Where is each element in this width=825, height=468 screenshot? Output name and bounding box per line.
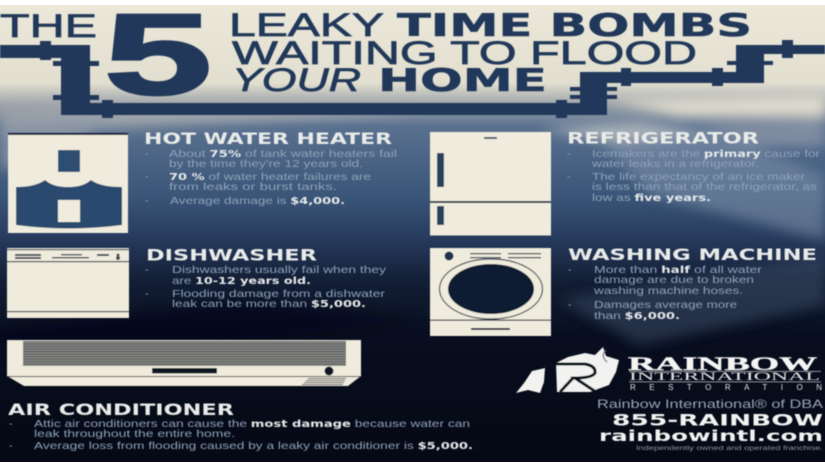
text: washing machine facts: - [568,299,572,311]
text: hot water heater facts [145,148,397,207]
title: THE [0,8,97,44]
text: hot water heater facts: from leaks or burst tanks. [169,181,337,193]
text: dishwasher facts: - [145,264,149,276]
text: refrigerator facts: low as five years. [592,192,711,204]
text: hot water heater facts: - [145,195,149,207]
title: WAITING TO FLOOD [232,35,697,71]
text: dishwasher facts: Flooding damage from a dishwater [172,288,386,300]
heading: washing machine: WASHING MACHINE [568,245,817,264]
text: franchise disclaimer: Independently owned and operated franchise. [636,445,823,452]
title: HOME [378,63,547,99]
text: washing machine facts: More than half of all water [594,264,763,276]
heading: dishwasher: DISHWASHER [146,246,317,264]
text: air conditioner facts: Average loss from flooding caused by a leaky air conditioner is $5,000. [34,440,473,452]
text: hot water heater facts: - [145,148,149,160]
logo wordmark: RAINBOW [628,354,817,375]
text: washing machine facts: Damages average more [594,299,737,311]
text: washing machine facts: washing machine hoses. [593,285,743,297]
icon: refrigerator [430,132,551,236]
logo wordmark: RESTORATION [630,383,822,392]
text: washing machine facts: - [568,264,572,276]
text: air conditioner facts: Attic air conditioners can cause the most damage because water can [34,418,470,430]
text: refrigerator facts: water leaks in a refrigerator. [591,158,759,170]
text: dishwasher facts: - [145,288,149,300]
title: TIME BOMBS [397,8,752,44]
text: air conditioner facts: - [9,418,13,430]
text: washing machine facts: damage are due to broken [594,274,754,286]
pipes [0,40,825,118]
text: refrigerator facts: - [567,171,571,183]
text: washing machine facts [568,264,763,322]
logo mark: flame R [516,347,619,393]
text: air conditioner facts [9,418,473,452]
icon: water heater [8,133,128,233]
heading: air conditioner: AIR CONDITIONER [8,400,234,419]
text: hot water heater facts: Average damage is $4,000. [170,195,345,207]
text: dishwasher facts: leak can be more than $5,000. [172,298,366,310]
text: refrigerator facts: Icemakers are the primary cause for [592,148,821,160]
logo wordmark [628,354,822,392]
logo wordmark: INTERNATIONAL [629,371,820,383]
icon: air conditioner [7,340,361,386]
text: refrigerator facts [567,148,821,204]
text: hot water heater facts: About 75% of tank water heaters fail [169,148,397,160]
heading: hot water heater: HOT WATER HEATER [144,129,392,148]
logo: rainbow international restoration [516,347,822,393]
icon: dishwasher [7,248,129,318]
text: hot water heater facts: 70 % of water heater failures are [169,171,371,183]
text: hot water heater facts: - [145,171,149,183]
text: refrigerator facts: is less than that of the refrigerator, as [592,181,817,193]
text: dishwasher facts: Dishwashers usually fail when they [172,264,387,276]
text: washing machine facts: than $6,000. [594,310,680,322]
title: LEAKY [229,7,384,43]
title: YOUR [232,62,361,98]
text: phone number: 855-RAINBOW [612,410,824,430]
text: air conditioner facts: leak throughout the entire home. [34,428,235,440]
text: dishwasher facts [145,264,387,310]
text: refrigerator facts: - [567,148,571,160]
text: hot water heater facts: by the time they're 12 years old. [169,158,363,170]
text: air conditioner facts: - [9,440,13,452]
icon: washing machine [430,248,551,336]
title [0,0,752,119]
heading: refrigerator: REFRIGERATOR [567,128,759,148]
text: website: rainbowintl.com [599,427,823,445]
text: franchise name: Rainbow International® of DBA [597,397,823,411]
text: refrigerator facts: The life expectancy of an ice maker [592,171,806,183]
text: dishwasher facts: are 10-12 years old. [172,275,311,287]
